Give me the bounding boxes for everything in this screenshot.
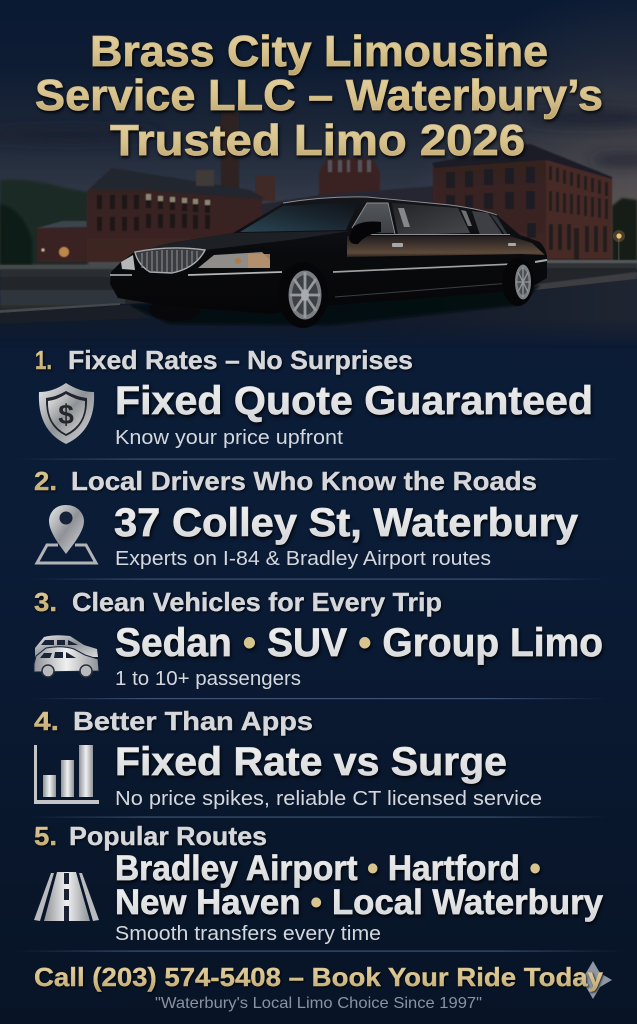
- main lines 5: [115, 848, 603, 922]
- tagline: "Waterbury's Local Limo Choice Since 1997": [155, 995, 482, 1012]
- sub line 4: No price spikes, reliable CT licensed service: [115, 788, 542, 810]
- clouds: [0, 109, 637, 166]
- title: Service LLC – Waterbury’s: [35, 71, 603, 120]
- mirror: [349, 222, 381, 244]
- icon: shield with dollar sign: $: [58, 399, 74, 430]
- section 5: popular routes: [34, 821, 603, 945]
- heading 1: 1.: [35, 345, 52, 375]
- guard rail, verge and pavement: [0, 260, 637, 310]
- section 4: better than apps: [34, 706, 542, 810]
- right mill building: [432, 144, 612, 262]
- street lamp: [613, 230, 625, 260]
- title: [35, 27, 603, 165]
- section 3: clean vehicles: [34, 587, 603, 690]
- heading 5: 5.: [34, 821, 57, 851]
- heading 5: Popular Routes: [69, 821, 267, 851]
- chimney: [221, 112, 239, 237]
- heading 3: Clean Vehicles for Every Trip: [72, 587, 442, 617]
- car body: [110, 197, 547, 314]
- connecting building: [240, 186, 434, 240]
- grille: [135, 248, 205, 273]
- heading 4: Better Than Apps: [73, 706, 313, 736]
- main line 4: Fixed Rate vs Surge: [115, 740, 507, 784]
- front tyre under bumper: [149, 299, 201, 321]
- windshield: [240, 202, 358, 232]
- section 1: fixed rates: [35, 345, 593, 449]
- section 2: local drivers: [34, 466, 579, 570]
- sub line 5: Smooth transfers every time: [115, 923, 381, 945]
- tower: [319, 158, 380, 196]
- left mill building: [87, 168, 265, 262]
- sub line 1: Know your price upfront: [115, 427, 343, 449]
- call to action: Call (203) 574-5408 – Book Your Ride Today: [34, 962, 604, 992]
- side windows: [352, 203, 508, 235]
- main lines 5: Bradley Airport • Hartford •: [115, 848, 541, 888]
- door reflection: [347, 236, 545, 257]
- icon: shield with dollar sign: [39, 383, 94, 444]
- heading 1: Fixed Rates – No Surprises: [68, 345, 413, 375]
- main line 1: Fixed Quote Guaranteed: [115, 379, 593, 423]
- limousine: [110, 197, 547, 328]
- sub line 2: Experts on I-84 & Bradley Airport routes: [115, 548, 491, 570]
- title: Brass City Limousine: [90, 27, 548, 76]
- sub line 3: 1 to 10+ passengers: [115, 668, 301, 690]
- heading 2: 2.: [34, 466, 57, 496]
- title: Trusted Limo 2026: [110, 116, 525, 165]
- hero photo: mill buildings and limousine: [0, 0, 637, 348]
- icon: map pin: [37, 505, 96, 563]
- icon: vehicles: [34, 635, 99, 677]
- main line 3: Sedan • SUV • Group Limo: [115, 621, 603, 665]
- side chrome trim: [333, 264, 513, 272]
- fog lamp: [121, 255, 135, 270]
- icon: road: [34, 872, 99, 921]
- hills: [0, 180, 88, 265]
- window chrome: [283, 197, 510, 234]
- heading 2: Local Drivers Who Know the Roads: [71, 466, 537, 496]
- car shadow: [130, 285, 540, 325]
- road: [0, 279, 637, 345]
- heading 3: 3.: [34, 587, 57, 617]
- headlight: [198, 252, 270, 268]
- door handles: [392, 243, 516, 247]
- heading 4: 4.: [34, 706, 59, 736]
- front wheel: [278, 262, 328, 328]
- hood sheen: [135, 231, 350, 252]
- sky: [0, 0, 637, 270]
- rear wheel: [502, 258, 534, 306]
- icon: bar chart: [34, 745, 99, 804]
- photo fade into panel: [0, 318, 637, 348]
- main line 2: 37 Colley St, Waterbury: [114, 501, 579, 545]
- small left building: [37, 221, 87, 262]
- icon: sparkle star: [578, 961, 612, 999]
- main lines 5: New Haven • Local Waterbury: [115, 882, 603, 922]
